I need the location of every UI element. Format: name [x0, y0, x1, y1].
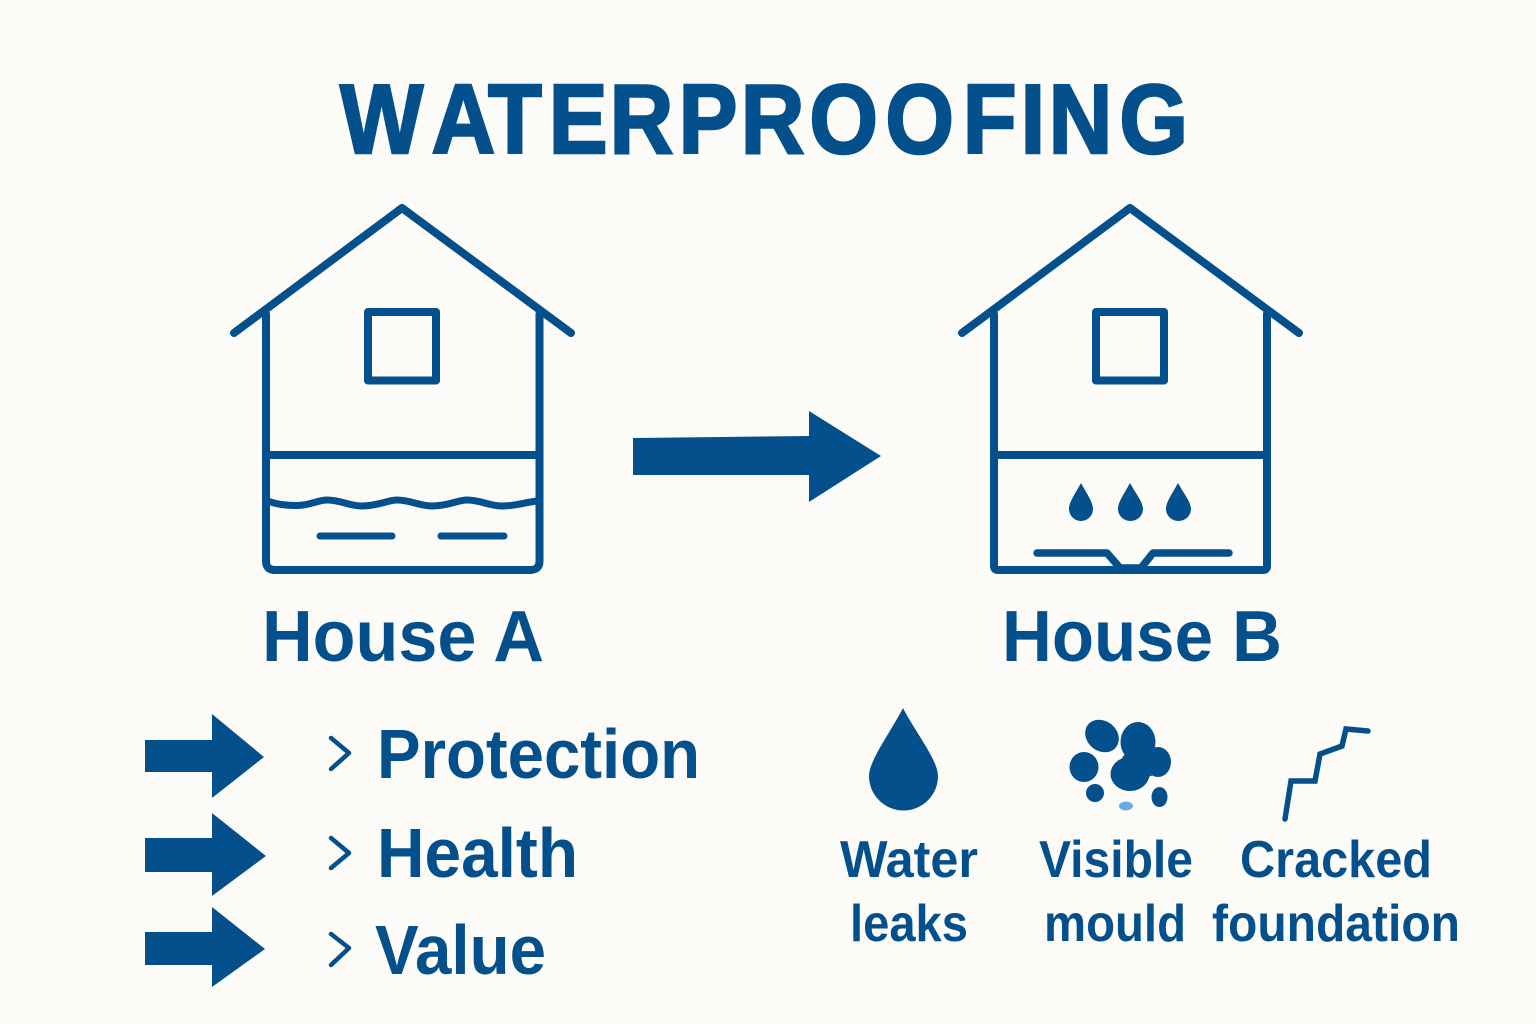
house B floor line: [994, 451, 1267, 459]
visible mould label line 2: mould: [1044, 895, 1186, 953]
icon: water drop: [869, 708, 938, 810]
sign: visible mould: [1039, 713, 1193, 953]
cracked foundation label: Cracked: [1240, 831, 1432, 889]
house B label: House B: [1002, 597, 1282, 677]
icon: chevron: [331, 934, 349, 965]
house A water wave: [268, 500, 538, 506]
house B window: [1096, 312, 1164, 380]
icon: crack: [1285, 729, 1368, 819]
house B foundation crack: [1037, 553, 1229, 568]
house B water drops: [1069, 483, 1191, 521]
sign: water leaks: [840, 708, 978, 953]
sign: cracked foundation: [1212, 729, 1460, 953]
water leaks label: Water: [840, 831, 978, 889]
icon: mould spots: [1070, 713, 1171, 807]
icon: chevron: [331, 738, 349, 769]
value label: Value: [375, 911, 546, 989]
icon: arrow: [145, 907, 265, 987]
benefit: protection: [145, 714, 700, 798]
title: WATERPROOFING: [340, 65, 1188, 174]
cracked foundation label line 2: foundation: [1212, 895, 1460, 953]
house A roof: [234, 208, 571, 333]
house A walls and foundation: [266, 314, 540, 570]
house A water dashes: [320, 532, 504, 540]
benefit: value: [145, 907, 546, 989]
benefit: health: [145, 813, 578, 896]
health label: Health: [377, 814, 578, 892]
panel: house A: [234, 208, 571, 570]
house A label: House A: [262, 597, 544, 677]
arrow: A to B: [633, 411, 881, 502]
icon: arrow: [145, 813, 266, 896]
water leaks label line 2: leaks: [850, 895, 968, 953]
house B roof: [962, 208, 1299, 333]
icon: light mould spot: [1119, 802, 1133, 810]
protection label: Protection: [377, 715, 700, 793]
icon: chevron: [331, 838, 349, 868]
house A floor line: [266, 451, 539, 459]
visible mould label: Visible: [1039, 831, 1193, 889]
house B walls and foundation: [994, 314, 1267, 570]
panel: house B: [962, 208, 1299, 570]
house A window: [368, 312, 436, 380]
icon: arrow: [145, 714, 264, 798]
